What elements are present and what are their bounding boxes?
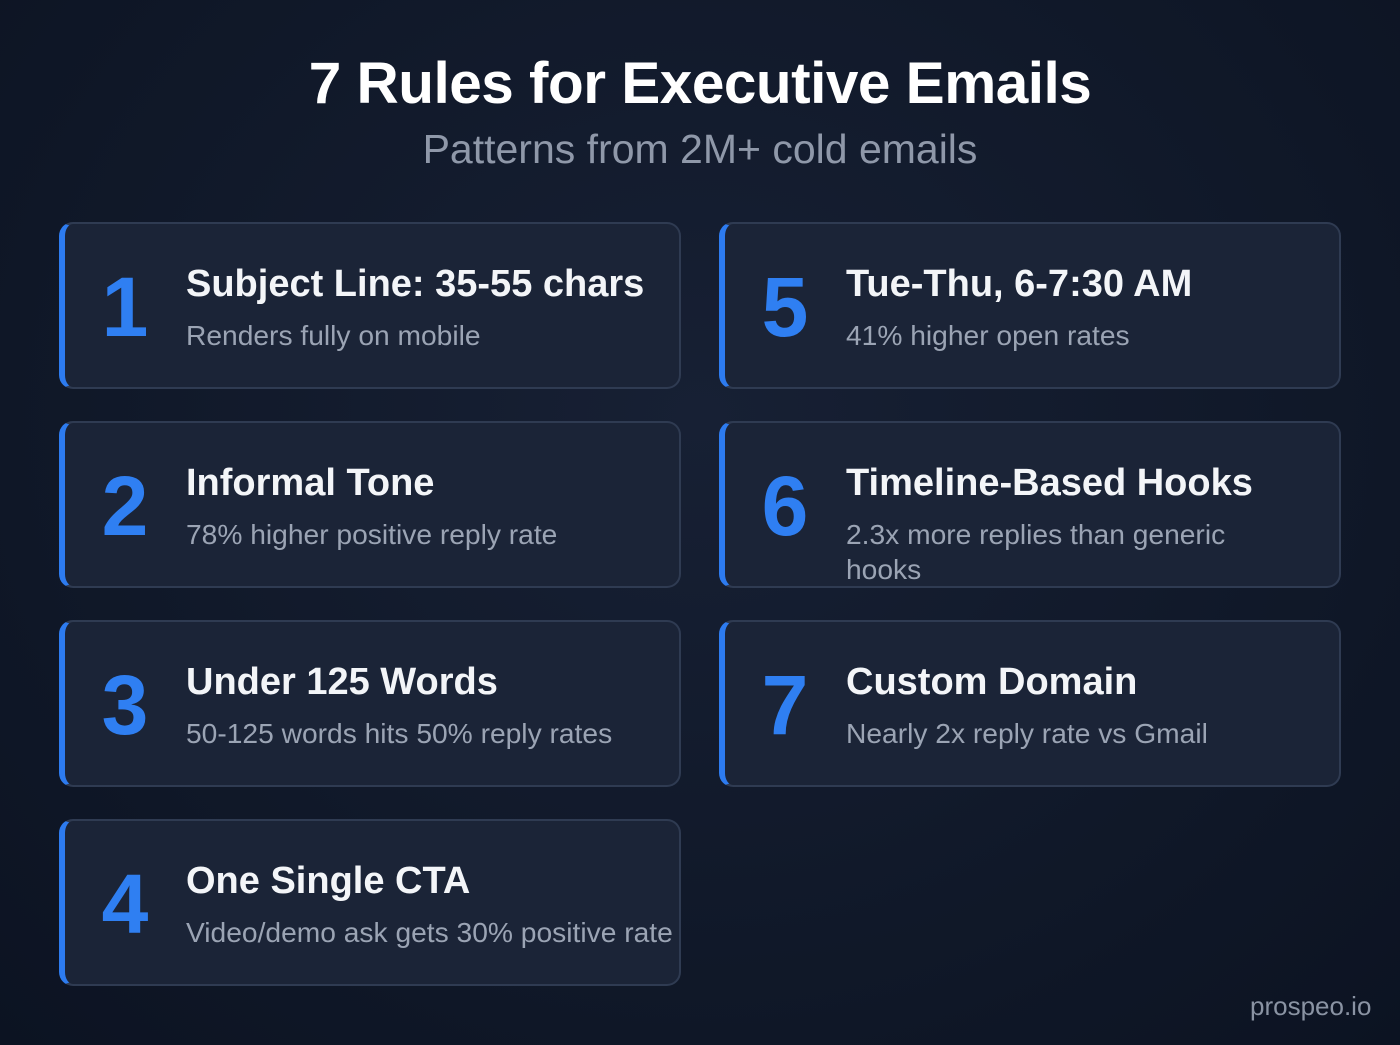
card 6 — [719, 421, 1341, 588]
title: 7 Rules for Executive Emails — [309, 51, 1091, 116]
footer brand: prospeo.io — [1250, 991, 1371, 1021]
card 2: 2 — [102, 459, 148, 553]
card 7: 7 — [762, 658, 808, 752]
card 2: 78% higher positive reply rate — [186, 518, 557, 550]
card 3: 50-125 words hits 50% reply rates — [186, 717, 612, 749]
card 1: Renders fully on mobile — [186, 319, 481, 351]
card 6: 2.3x more replies than generic hooks — [846, 518, 1225, 585]
card 2: Informal Tone — [186, 462, 434, 504]
card 1 — [59, 222, 681, 389]
card 7 — [719, 620, 1341, 787]
card 4: One Single CTA — [186, 860, 470, 902]
card 6: 6 — [762, 459, 808, 553]
card 1: 1 — [102, 260, 148, 354]
card 2 — [59, 421, 681, 588]
card 7: Custom Domain — [846, 661, 1137, 703]
card 5: 41% higher open rates — [846, 319, 1130, 351]
card 3: 3 — [102, 658, 148, 752]
card 4: Video/demo ask gets 30% positive rate — [186, 916, 673, 948]
card 5 — [719, 222, 1341, 389]
card 3: Under 125 Words — [186, 661, 498, 703]
card 5: 5 — [762, 260, 808, 354]
card 1: Subject Line: 35-55 chars — [186, 263, 644, 305]
card 4: 4 — [102, 857, 148, 951]
card 4 — [59, 819, 681, 986]
subtitle: Patterns from 2M+ cold emails — [423, 126, 977, 172]
card 5: Tue-Thu, 6-7:30 AM — [846, 263, 1192, 305]
card 7: Nearly 2x reply rate vs Gmail — [846, 717, 1208, 749]
card 6: Timeline-Based Hooks — [846, 462, 1253, 504]
card 3 — [59, 620, 681, 787]
